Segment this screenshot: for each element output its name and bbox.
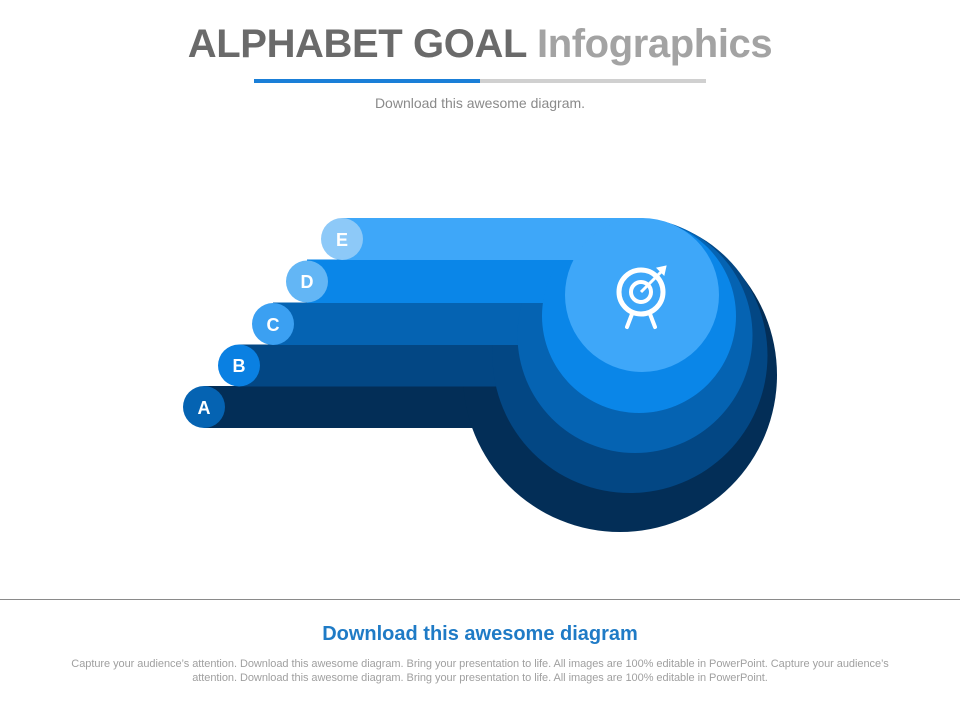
subtitle: Download this awesome diagram. xyxy=(375,95,585,111)
footer text: Capture your audience’s attention. Download this awesome diagram. Bring your presentation to life. All images are 100% editable in PowerPoint. Capture your audience’s attention. Download this awesome diagram. Bring your presentation to life. All images are 100% editable in PowerPoint. xyxy=(71,658,889,684)
layer A: A xyxy=(198,398,210,418)
layer C: C xyxy=(266,315,280,335)
divider line xyxy=(0,599,960,600)
layer B xyxy=(218,218,768,493)
layer D: D xyxy=(300,272,314,292)
layer D xyxy=(286,219,736,413)
layer A xyxy=(183,218,777,532)
icon: target xyxy=(619,266,666,327)
layer C xyxy=(252,218,752,453)
layer E xyxy=(321,218,719,372)
title underline xyxy=(254,79,706,83)
layer E: E xyxy=(336,230,348,250)
footer heading: Download this awesome diagram xyxy=(322,623,638,645)
layer B: B xyxy=(232,356,246,376)
title: ALPHABET GOAL Infographics xyxy=(188,22,772,66)
